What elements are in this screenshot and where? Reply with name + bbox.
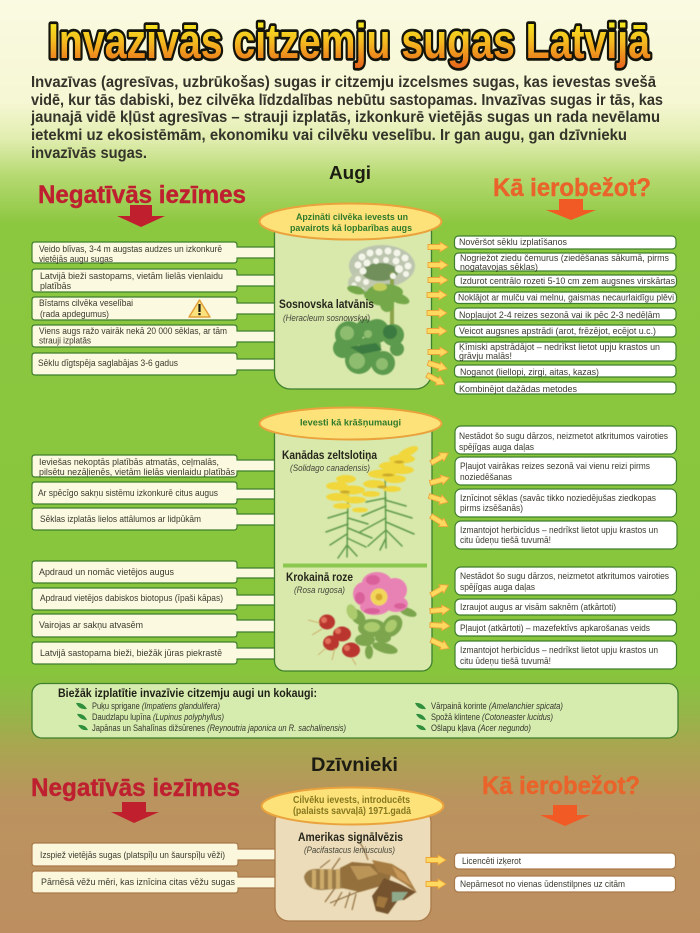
intro text: Invazīvas (agresīvas, uzbrūkošas) sugas ir citzemju izcelsmes sugas, kas ievestas svešā <box>31 74 656 91</box>
intro text: vidē, kur tās dabiski, bez cilvēka līdzdalības nebūtu sastopamas. Invazīvas sugas ir tās, kas <box>31 92 663 109</box>
box: do not transfer <box>454 876 676 892</box>
box: uproot <box>455 599 676 615</box>
box: seed spread: Sēklas izplatās lielos attālumos ar lidpūkām <box>40 513 201 524</box>
list heading: Biežāk izplatītie invazīvie citzemju augi un kokaugi: <box>58 688 317 700</box>
box: seed count: strauji izplatās <box>39 334 91 346</box>
box: herbicides <box>455 641 676 669</box>
box: chemical <box>454 341 676 361</box>
box: destroy seeds <box>455 489 676 517</box>
ellipse: hogweed origin: Apzināti cilvēka ievests un <box>296 211 408 222</box>
box: dense stands: vietējās augu sugas <box>39 253 113 264</box>
list items: Ošlapu kļava (Acer negundo) <box>431 723 531 734</box>
heading: Augi: Augi <box>329 163 371 183</box>
intro text <box>30 74 663 162</box>
box: dense stands <box>32 242 276 264</box>
heading: negative signs, plants: Negatīvās iezīmes <box>38 181 246 209</box>
box: mow <box>455 457 676 485</box>
box: do not transfer: Nepārnesot no vienas ūdenstilpnes uz citām <box>460 878 625 889</box>
box: cut umbels: nogatavojas sēklas) <box>460 261 538 272</box>
divider bar <box>283 564 427 568</box>
box: germination <box>32 353 276 375</box>
box: mow: Pļaujot vairākas reizes sezonā vai vienu reizi pirms <box>460 460 650 471</box>
box: do not plant: spējīgas auga daļas <box>460 581 535 592</box>
right boxes: hogweed measures <box>454 236 676 394</box>
panel: signal crayfish <box>275 808 431 921</box>
list items: Japānas un Sahalīnas dižsūrenes (Reynoutria japonica un R. sachalinensis) <box>92 723 346 734</box>
latin name: goldenrod: (Solidago canadensis) <box>290 463 370 474</box>
ellipse: ornamental origin: Ievesti kā krāšņumaugi <box>300 416 401 428</box>
box: mow <box>455 620 676 636</box>
box: crayfish plague <box>32 871 277 893</box>
box: combine: Kombinējot dažādas metodes <box>459 383 577 394</box>
box: do not plant <box>455 426 676 454</box>
box: herbicides: citu ūdeņu tiešā tuvumā! <box>460 534 551 545</box>
list items <box>92 701 563 734</box>
box: germination: Sēklu dīgtspēja saglabājas 3-6 gadus <box>38 357 178 368</box>
right boxes: rose measures <box>455 567 676 669</box>
heading: how to limit, plants: Kā ierobežot? <box>493 174 651 202</box>
arrow: orange down <box>540 805 590 826</box>
list items: Vārpainā korinte (Amelanchier spicata) <box>431 701 563 712</box>
box: coast <box>32 642 276 664</box>
box: dense stands: Veido blīvas, 3-4 m augstas audzes un izkonkurē <box>39 243 222 254</box>
species name: Sosnovska latvānis <box>279 299 374 311</box>
ellipse: ornamental origin <box>260 408 442 440</box>
box: abandoned land <box>32 455 276 477</box>
box: displaces species <box>32 843 277 866</box>
heading: how to limit, animals: Kā ierobežot? <box>482 772 640 800</box>
arrows: hogweed to measures <box>425 242 449 389</box>
panel: goldenrod and rose <box>274 420 432 671</box>
arrows: crayfish to measures <box>426 855 446 889</box>
box: chemical: Ķīmiski apstrādājot – nedrīkst lietot upju krastos un <box>459 341 660 352</box>
box: combine <box>454 382 676 394</box>
box: mow: Pļaujot (atkārtoti) – mazefektīvs apkarošanas veids <box>460 622 650 633</box>
box: common in Latvia: Latvijā bieži sastopams, vietām lielās vienlaidu <box>40 270 223 281</box>
box: dangerous to health: (rada apdegumus) <box>40 308 109 319</box>
box: herbicides: Izmantojot herbicīdus – nedrīkst lietot upju krastos un <box>460 524 658 535</box>
latin name: (Heracleum sosnowskyi) <box>283 313 370 324</box>
box: herbicides: Izmantojot herbicīdus – nedrīkst lietot upju krastos un <box>460 644 658 655</box>
arrow: orange down <box>546 199 596 220</box>
list items: Spožā klintene (Cotoneaster lucidus) <box>431 712 553 723</box>
box: tillage: Veicot augsnes apstrādi (arot, frēzējot, ecējot u.c.) <box>459 325 656 336</box>
heading: Dzīvnieki: Dzīvnieki <box>311 755 398 776</box>
box: mowing: Nopļaujot 2-4 reizes sezonā vai ik pēc 2-3 nedēļām <box>459 309 660 320</box>
box: common in Latvia <box>32 269 276 292</box>
right boxes: crayfish measures <box>454 853 676 892</box>
arrow: red down <box>117 205 165 227</box>
latin name: (Pacifastacus leniusculus) <box>304 845 395 856</box>
illustration: goldenrod <box>326 444 420 558</box>
box: mow: noziedēšanas <box>460 471 512 482</box>
box: seed count <box>32 325 276 347</box>
ellipse: hogweed origin <box>260 204 442 240</box>
ellipse: crayfish origin: (palaists savvaļā) 1971.gadā <box>293 806 411 817</box>
box: destroy seeds: pirms izsēšanās) <box>460 502 523 513</box>
box: chemical: grāvju malās! <box>459 350 512 361</box>
arrows: rose to measures <box>428 581 451 653</box>
box: do not plant: Nestādot šo sugu dārzos, neizmetot atkritumos vairoties <box>459 430 668 441</box>
list items: Daudzlapu lupīna (Lupinus polyphyllus) <box>92 712 224 723</box>
left boxes: rose negative signs <box>32 561 276 664</box>
box: cut umbels <box>454 252 676 272</box>
left boxes: hogweed negative signs <box>32 242 276 375</box>
box: common in Latvia: platībās <box>40 280 71 291</box>
panel: common invasive plants list <box>32 684 678 738</box>
ellipse: crayfish origin: Cilvēku ievests, introducēts <box>293 795 410 806</box>
left boxes: goldenrod negative signs <box>32 455 276 530</box>
intro text: ietekmi uz ekosistēmām, ekonomiku vai cilvēku veselību. Ir gan augu, gan dzīvnieku <box>31 127 627 144</box>
ellipse: hogweed origin: pavairots kā lopbarības augs <box>290 222 412 233</box>
leaf bullets <box>76 703 426 730</box>
box: seed count: Viens augs ražo vairāk nekā 20 000 sēklas, ar tām <box>39 325 227 336</box>
panel: hogweed <box>274 212 432 389</box>
box: displaces species: Izspiež vietējās sugas (platspīļu un šaurspīļu vēži) <box>40 849 225 860</box>
box: grazing: Noganot (liellopi, zirgi, aitas, kazas) <box>460 366 599 377</box>
box: root suckers <box>32 614 276 637</box>
list items: Puķu sprigane (Impatiens glandulifera) <box>92 701 220 712</box>
box: crayfish plague: Pārnēsā vēžu mēri, kas iznīcina citas vēžu sugas <box>41 876 235 887</box>
box: herbicides <box>455 521 677 549</box>
arrows: goldenrod to measures <box>427 449 451 531</box>
intro text: jaunajā vidē kļūst agresīvas – strauji izplatās, izkonkurē vietējās sugas un rada nevēlamu <box>30 109 660 126</box>
box: do not plant <box>455 567 676 595</box>
right boxes: goldenrod measures <box>455 426 677 549</box>
box: dangerous to health <box>32 297 276 320</box>
box: do not plant: spējīgas auga daļas <box>459 441 534 452</box>
box: mulch: Noklājot ar mulču vai melnu, gaismas necaurlaidīgu plēvi <box>458 292 674 302</box>
box: dangerous to health: Bīstams cilvēka veselībai <box>39 297 133 308</box>
icon: warning triangle <box>189 300 210 317</box>
box: coast: Latvijā sastopama bieži, biežāk jūras piekrastē <box>40 647 222 658</box>
species name: rose: Krokainā roze <box>286 572 353 584</box>
box: grazing <box>454 365 676 377</box>
intro text: invazīvās sugas. <box>31 145 147 162</box>
box: seeds: Novēršot sēklu izplatīšanos <box>459 236 567 247</box>
box: root system: Ar spēcīgo sakņu sistēmu izkonkurē citus augus <box>38 487 218 498</box>
species name: Amerikas signālvēzis <box>298 832 403 844</box>
box: herbicides: citu ūdeņu tiešā tuvumā! <box>460 655 551 666</box>
box: abandoned land: pilsētu nezāļienēs, vietām lielās vienlaidu platībās <box>39 466 235 477</box>
box: do not plant: Nestādot šo sugu dārzos, neizmetot atkritumos vairoties <box>460 570 669 581</box>
box: threatens biotopes <box>32 588 276 610</box>
box: suppresses plants <box>32 561 276 583</box>
ellipse: crayfish origin <box>262 788 444 824</box>
left boxes: crayfish negative signs <box>32 843 277 893</box>
box: abandoned land: Ieviešas nekoptās platībās atmatās, ceļmalās, <box>39 456 219 467</box>
box: licensed catching <box>454 853 676 869</box>
box: threatens biotopes: Apdraud vietējos dabiskos biotopus (īpaši kāpas) <box>40 592 223 603</box>
box: suppresses plants: Apdraud un nomāc vietējos augus <box>39 566 174 577</box>
box: destroy seeds: Iznīcinot sēklas (savāc tikko noziedējušas ziedkopas <box>460 492 656 503</box>
latin name: rose: (Rosa rugosa) <box>294 585 345 596</box>
box: seeds <box>454 236 676 249</box>
illustration: rose <box>308 572 418 665</box>
box: root suckers: Vairojas ar sakņu atvasēm <box>39 619 143 630</box>
box: licensed catching: Licencēti izķerot <box>462 855 521 866</box>
box: root system <box>32 482 276 504</box>
arrow: red down <box>111 802 159 823</box>
heading: negative signs, animals: Negatīvās iezīmes <box>31 774 240 802</box>
species name: goldenrod: Kanādas zeltslotiņa <box>282 450 378 462</box>
box: rosette: Izdurot centrālo rozeti 5-10 cm zem augsnes virskārtas <box>460 275 675 286</box>
box: cut umbels: Nogriežot ziedu čemurus (ziedēšanas sākumā, pirms <box>460 252 669 263</box>
box: uproot: Izraujot augus ar visām saknēm (atkārtoti) <box>460 601 616 612</box>
illustration: crayfish <box>304 843 417 914</box>
illustration: hogweed <box>333 245 415 375</box>
box: seed spread <box>32 508 276 530</box>
